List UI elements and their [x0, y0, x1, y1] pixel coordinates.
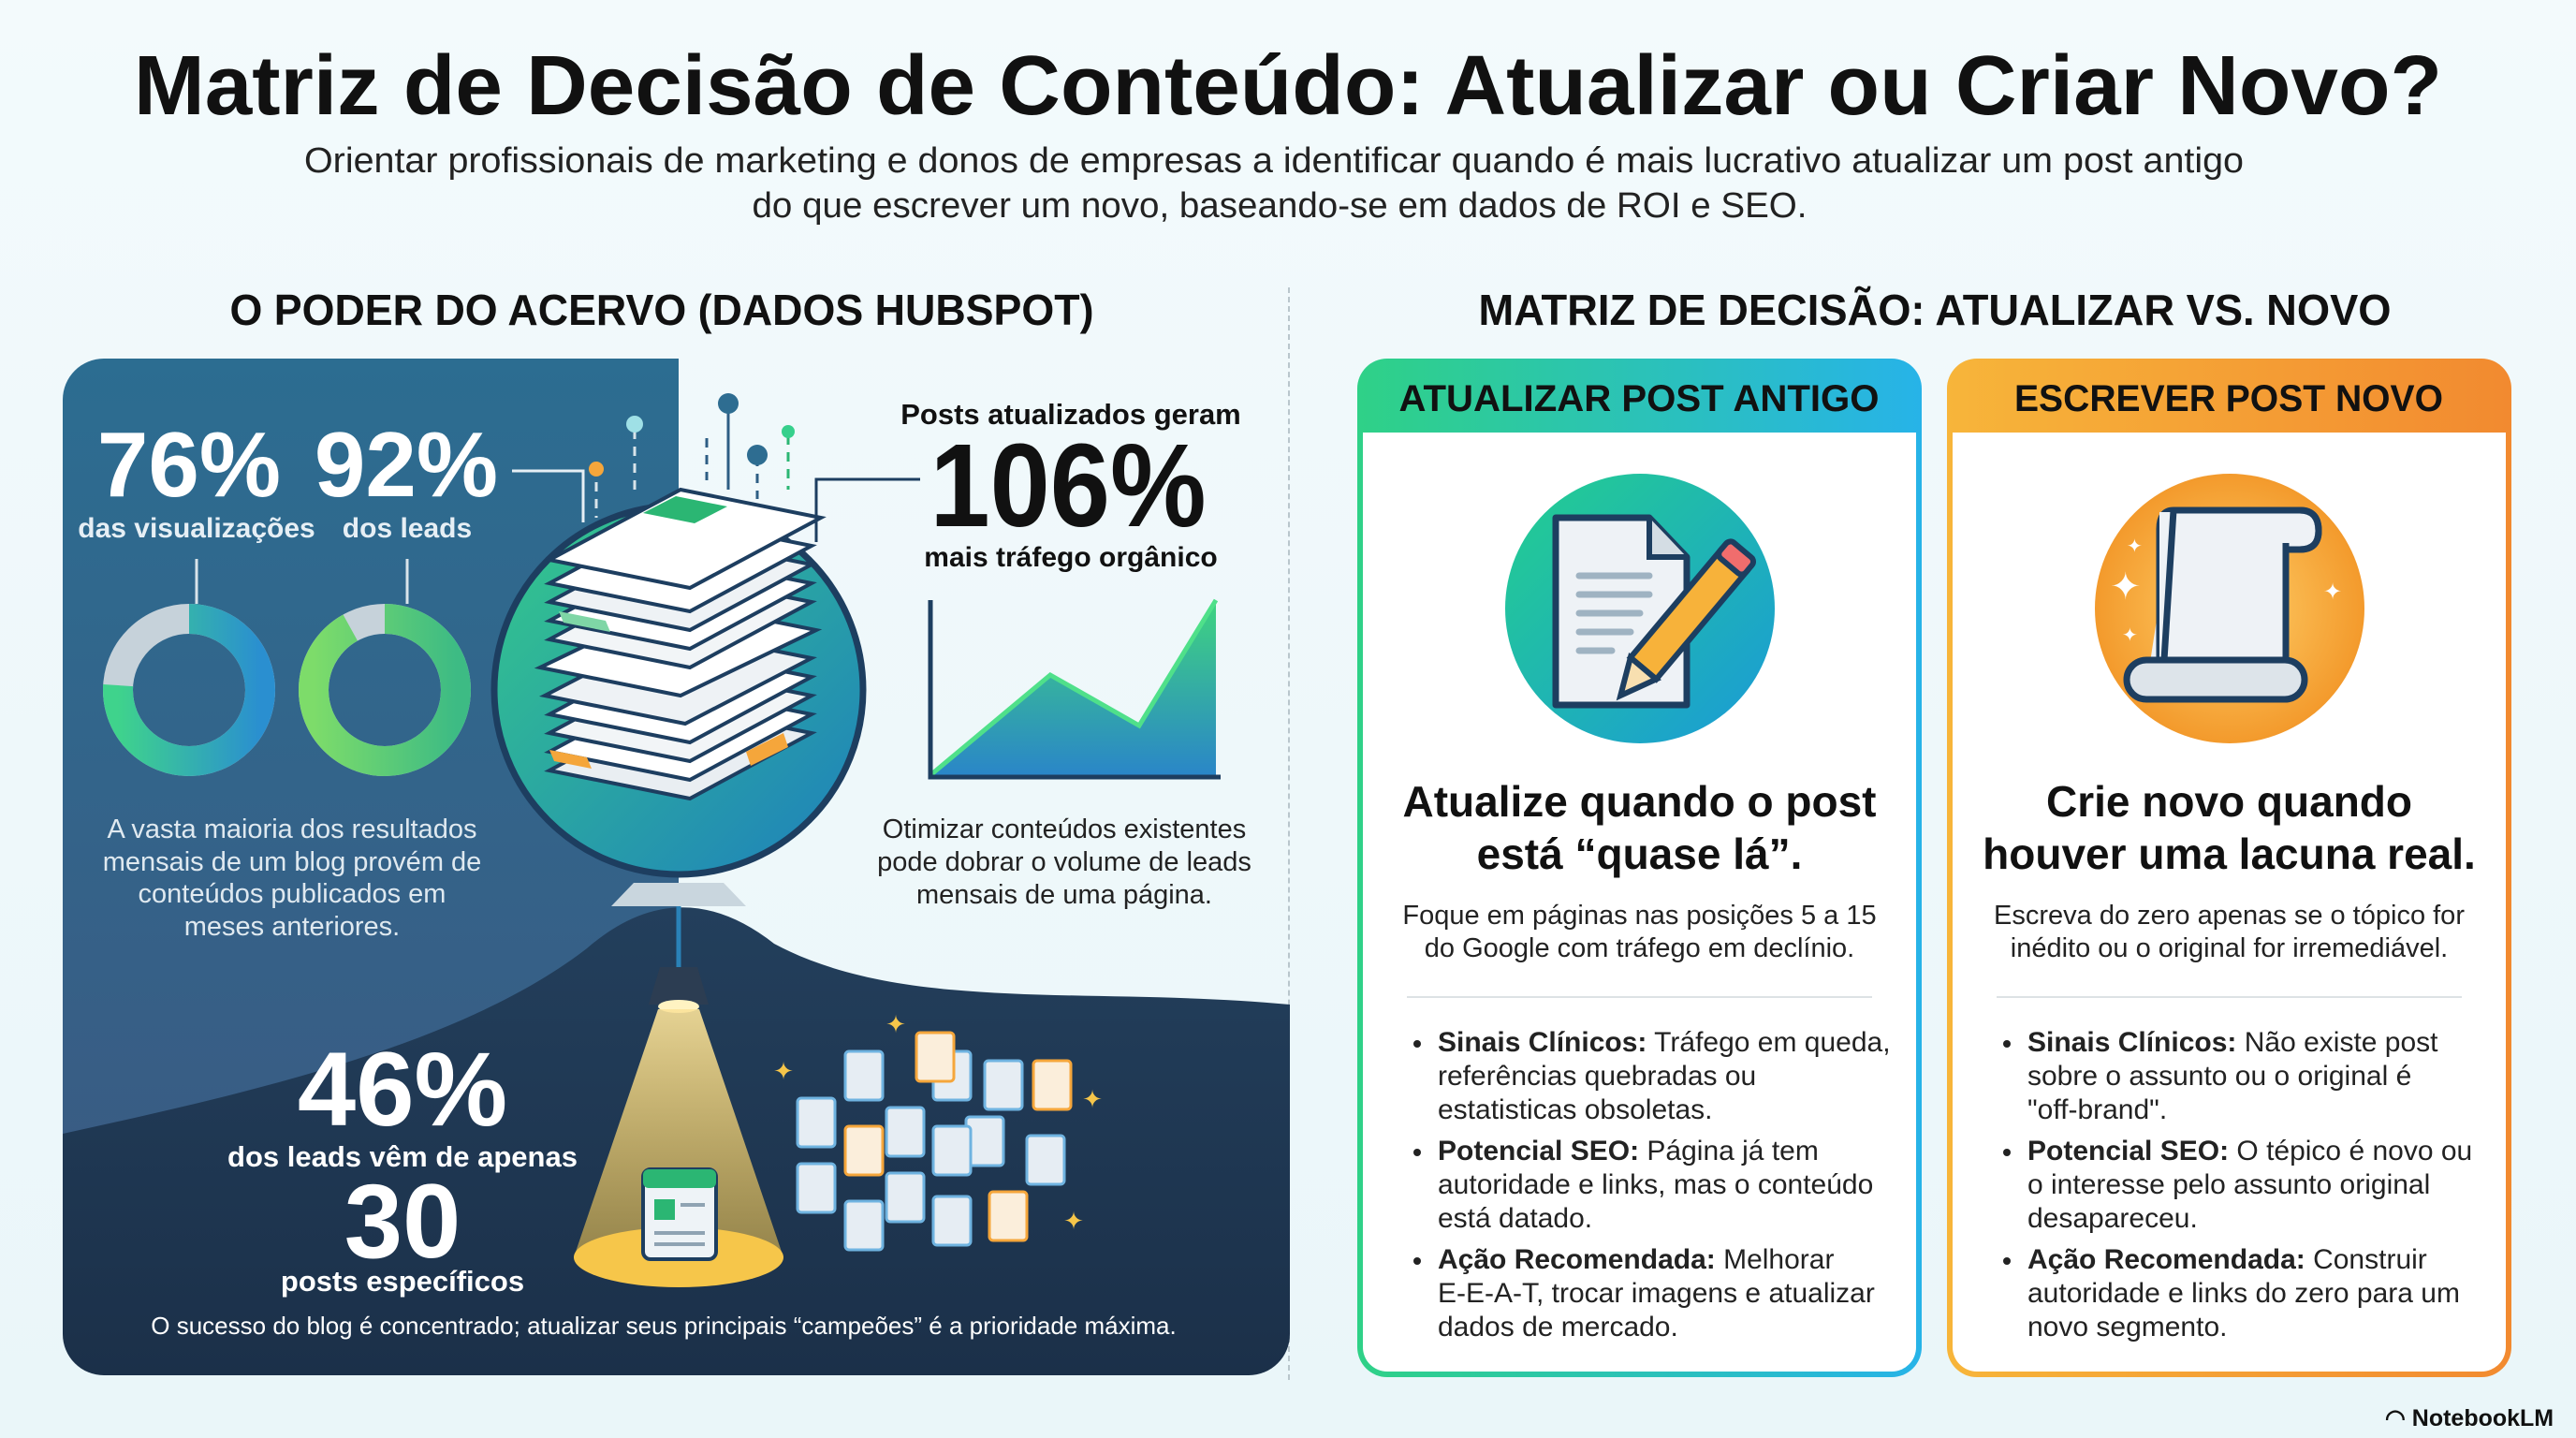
title: Orientar profissionais de marketing e donos de empresas a identificar quando é mais lucrativo atualizar um post antigo — [304, 141, 2244, 181]
heading — [1402, 777, 1876, 878]
text: vasta maioria: conteúdos publicados em — [139, 879, 446, 909]
bullet list: Ação Recomendada: Melhorar — [1438, 1244, 1834, 1275]
icon: dots — [589, 393, 795, 518]
donut: 92% — [314, 619, 456, 761]
heading: Atualize quando o post — [1402, 777, 1876, 826]
bullet list: Sinais Clínicos: Tráfego em queda, — [1438, 1027, 1891, 1058]
icon: scroll: ✦ — [2323, 579, 2342, 605]
icon: document stack — [540, 490, 821, 799]
section heading: right: MATRIZ DE DECISÃO: ATUALIZAR VS. NOVO — [1479, 286, 2391, 334]
logo: NotebookLM: ◠ NotebookLM — [2385, 1405, 2554, 1431]
chart: growth — [930, 600, 1221, 777]
heading: Crie novo quando — [2046, 777, 2412, 826]
bullet list: autoridade e links do zero para um — [2027, 1278, 2460, 1309]
text: vasta maioria: A vasta maioria dos resultados — [108, 814, 476, 844]
text block — [1402, 901, 1877, 963]
stat: 106%: Posts atualizados geram — [900, 398, 1241, 431]
stat: 46% / 30 posts — [227, 1031, 578, 1298]
stat: 46% / 30 posts: 30 — [344, 1163, 461, 1280]
heading — [1983, 777, 2476, 878]
text: otimizar: pode dobrar o volume de leads — [877, 847, 1251, 877]
bullet list: Potencial SEO: Página já tem — [1438, 1136, 1819, 1167]
text block — [1994, 901, 2465, 963]
text block: Escreva do zero apenas se o tópico for — [1994, 901, 2465, 931]
stat: 76%: 76% — [97, 413, 281, 516]
icon: document grid — [773, 1010, 1103, 1250]
stat: 92%: 92% — [315, 413, 498, 516]
stat: 76% — [78, 413, 315, 604]
bullet list: Ação Recomendada: Construir — [2027, 1244, 2427, 1275]
text block: inédito ou o original for irremediável. — [2011, 933, 2448, 963]
bullet list: está datado. — [1438, 1203, 1592, 1234]
globe with stand and lamp — [494, 506, 863, 1287]
text: vasta maioria: meses anteriores. — [184, 912, 400, 942]
stat: 92%: dos leads — [343, 513, 472, 544]
card header: ESCREVER POST NOVO — [2014, 378, 2443, 419]
icon: highlighted document — [643, 1169, 716, 1259]
section heading: left: O PODER DO ACERVO (DADOS HUBSPOT) — [230, 286, 1093, 334]
panel: o poder do acervo — [63, 359, 1290, 1375]
bullet list: o interesse pelo assunto original — [2027, 1169, 2430, 1200]
bullet list: referências quebradas ou — [1438, 1061, 1756, 1092]
bullet list: desapareceu. — [2027, 1203, 2198, 1234]
stat: 46% / 30 posts: posts específicos — [281, 1265, 524, 1298]
icon: document grid: ✦ — [1082, 1085, 1103, 1113]
heading: está “quase lá”. — [1477, 829, 1802, 878]
text: vasta maioria — [103, 814, 481, 942]
stat: 92% — [315, 413, 583, 604]
bullet list: "off-brand". — [2027, 1094, 2167, 1125]
icon: scroll: ✦ — [2127, 535, 2143, 557]
text: otimizar: Otimizar conteúdos existentes — [883, 814, 1246, 844]
stat: 46% / 30 posts: dos leads vêm de apenas — [227, 1140, 578, 1173]
stat: 106%: mais tráfego orgânico — [924, 542, 1218, 573]
card: atualizar post antigo — [1357, 359, 1922, 1377]
stat: 106% — [816, 398, 1241, 573]
bullet list: autoridade e links, mas o conteúdo — [1438, 1169, 1873, 1200]
title: do que escrever um novo, baseando-se em dados de ROI e SEO. — [753, 186, 1807, 225]
stat: 76%: das visualizações — [78, 513, 315, 544]
bullet list: sobre o assunto ou o original é — [2027, 1061, 2411, 1092]
card header: ATUALIZAR POST ANTIGO — [1398, 378, 1880, 419]
donut: 76% — [118, 619, 260, 761]
bullet list — [1413, 1027, 1891, 1343]
icon: document grid: ✦ — [1063, 1207, 1084, 1235]
heading: houver uma lacuna real. — [1983, 829, 2476, 878]
bullet list: estatisticas obsoletas. — [1438, 1094, 1712, 1125]
icon: scroll — [2095, 474, 2364, 743]
text: sucesso concentrado: O sucesso do blog é concentrado; atualizar seus principais “campeões” é a prioridade máxima. — [151, 1312, 1177, 1340]
title — [134, 39, 2442, 225]
bullet list — [2003, 1027, 2472, 1343]
icon: scroll: ✦ — [2122, 624, 2138, 646]
card: escrever post novo — [1947, 359, 2511, 1377]
bullet list: dados de mercado. — [1438, 1312, 1678, 1343]
icon: document grid: ✦ — [773, 1057, 794, 1085]
icon: scroll: ✦ — [2110, 565, 2142, 609]
icon: document grid: ✦ — [886, 1010, 906, 1038]
bullet list: Potencial SEO: O tépico é novo ou — [2027, 1136, 2472, 1167]
text: vasta maioria: mensais de um blog provém de — [103, 847, 481, 877]
bullet list: Sinais Clínicos: Não existe post — [2027, 1027, 2438, 1058]
text block: Foque em páginas nas posições 5 a 15 — [1402, 901, 1877, 931]
text: otimizar: mensais de uma página. — [916, 880, 1212, 910]
bullet list: E-E-A-T, trocar imagens e atualizar — [1438, 1278, 1875, 1309]
stat: 106%: 106% — [930, 419, 1206, 551]
title: Matriz de Decisão de Conteúdo: Atualizar ou Criar Novo? — [134, 39, 2442, 133]
bullet list: novo segmento. — [2027, 1312, 2227, 1343]
text block: do Google com tráfego em declínio. — [1425, 933, 1854, 963]
stat: 46% / 30 posts: 46% — [298, 1031, 507, 1148]
icon: document with pencil — [1505, 474, 1775, 743]
text: otimizar — [877, 814, 1251, 910]
